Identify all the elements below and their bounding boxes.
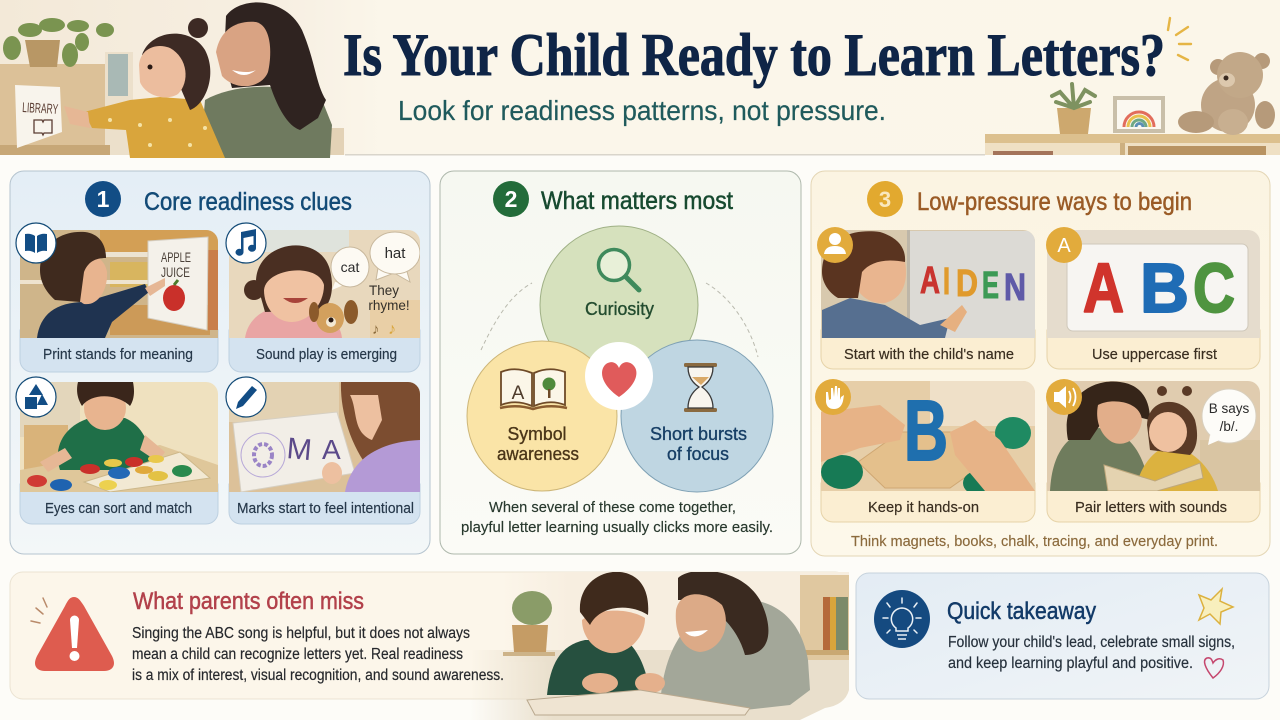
card: start with the child's name: E [982, 265, 999, 307]
card: start with the child's name: D [956, 263, 978, 305]
card: start with the child's name: I [943, 261, 950, 303]
panel 3 footnote: Think magnets, books, chalk, tracing, and everyday print. [851, 534, 1218, 550]
circle: curiosity [540, 226, 698, 384]
miss body text [132, 625, 504, 684]
icon: heart [1205, 658, 1223, 678]
photo: mother and child pointing at library sign [0, 2, 344, 158]
circle: short bursts of focus: of focus [667, 443, 729, 464]
caption: Marks start to feel intentional [237, 501, 414, 517]
takeaway body text: Follow your child's lead, celebrate small signs, [948, 634, 1235, 651]
card: print stands for meaning: JUICE [161, 265, 190, 280]
card: marks start to feel intentional [226, 377, 420, 524]
icon: star [1199, 589, 1233, 624]
card: sound play is emerging: ♪ [372, 321, 380, 338]
circle: short bursts of focus [621, 340, 773, 492]
badge 1 [85, 181, 121, 217]
card: print stands for meaning [16, 223, 218, 372]
panel 3 heading: Low-pressure ways to begin [917, 188, 1192, 216]
card: pair letters with sounds [1046, 379, 1260, 522]
icon: hand [815, 379, 851, 415]
caption: Keep it hands-on [868, 500, 979, 516]
caption: Print stands for meaning [43, 347, 193, 363]
card: eyes can sort and match [16, 377, 218, 524]
circle: symbol awareness: Symbol [508, 423, 566, 444]
caption: Start with the child's name [844, 347, 1014, 363]
card: sound play is emerging: hat [385, 245, 406, 262]
shelf decor [985, 52, 1280, 155]
takeaway body text: and keep learning playful and positive. [948, 655, 1193, 672]
card: print stands for meaning: APPLE [161, 250, 191, 265]
subtitle: Look for readiness patterns, not pressure. [398, 95, 886, 126]
icon: music notes [226, 223, 266, 263]
circle: curiosity: Curiosity [585, 298, 655, 319]
card: keep it hands-on: B [904, 384, 948, 479]
miss body text: Singing the ABC song is helpful, but it does not always [132, 625, 470, 642]
panel 3: low-pressure ways to begin [811, 171, 1270, 556]
icon: shapes [16, 377, 56, 417]
icon: lightbulb [874, 590, 930, 648]
card: use uppercase first: A [1083, 249, 1124, 327]
card: start with the child's name [817, 227, 1035, 369]
card: use uppercase first [1046, 227, 1260, 369]
venn summary: playful letter learning usually clicks more easily. [461, 519, 773, 536]
panel 2 heading: What matters most [541, 187, 733, 215]
card: pair letters with sounds: /b/. [1220, 419, 1238, 434]
card: sound play is emerging: They [369, 283, 399, 298]
library sign: LIBRARY [22, 99, 59, 117]
card: use uppercase first: C [1193, 249, 1235, 327]
icon: warning triangle [31, 597, 114, 671]
panel: quick takeaway [856, 573, 1269, 699]
icon: letter A: A [1057, 235, 1071, 257]
caption: Sound play is emerging [256, 347, 397, 363]
icon: letter A [1046, 227, 1082, 263]
circle: symbol awareness: A [512, 383, 525, 404]
miss heading: What parents often miss [133, 588, 364, 615]
caption: Use uppercase first [1092, 347, 1217, 363]
takeaway heading: Quick takeaway [947, 598, 1096, 625]
venn summary: When several of these come together, [489, 499, 736, 516]
card: start with the child's name: N [1004, 267, 1026, 309]
icon: open book [16, 223, 56, 263]
icon: pencil [226, 377, 266, 417]
circle: short bursts of focus: Short bursts [650, 423, 747, 444]
panel: what parents often miss [10, 571, 849, 720]
card: sound play is emerging [226, 223, 420, 372]
caption: Pair letters with sounds [1075, 500, 1227, 516]
panel 1 heading: Core readiness clues [144, 188, 352, 216]
badge 1: 1 [97, 186, 110, 212]
card: sound play is emerging: cat [341, 259, 359, 275]
panel 2: what matters most [440, 171, 801, 554]
header banner [0, 0, 1280, 158]
card: start with the child's name: A [920, 260, 940, 302]
photo: parent and child reading on rug [470, 571, 849, 720]
card: use uppercase first: B [1140, 249, 1189, 327]
takeaway body text [948, 634, 1235, 672]
miss body text: mean a child can recognize letters yet. Real readiness [132, 646, 463, 663]
card: pair letters with sounds: B says [1209, 401, 1250, 416]
icon: child profile [817, 227, 853, 263]
badge 2 [493, 181, 529, 217]
panel 1: core readiness clues [10, 171, 430, 554]
circle: symbol awareness [467, 341, 617, 491]
center heart [585, 342, 653, 410]
card: marks start to feel intentional: M [285, 432, 313, 467]
venn diagram [467, 226, 773, 492]
circle: symbol awareness: awareness [497, 443, 579, 464]
miss body text: is a mix of interest, visual recognition, and sound awareness. [132, 667, 504, 684]
caption: Eyes can sort and match [45, 501, 192, 517]
card: marks start to feel intentional: A [322, 434, 341, 465]
venn summary [461, 499, 773, 536]
badge 3: 3 [879, 187, 891, 212]
badge 2: 2 [505, 186, 517, 212]
card: keep it hands-on [815, 379, 1035, 522]
card: sound play is emerging: rhyme! [368, 298, 410, 313]
badge 3 [867, 181, 903, 217]
title sparkle rays [1168, 18, 1191, 60]
library sign [15, 85, 62, 148]
icon: speaker [1046, 379, 1082, 415]
card: sound play is emerging: ♪ [388, 321, 396, 338]
